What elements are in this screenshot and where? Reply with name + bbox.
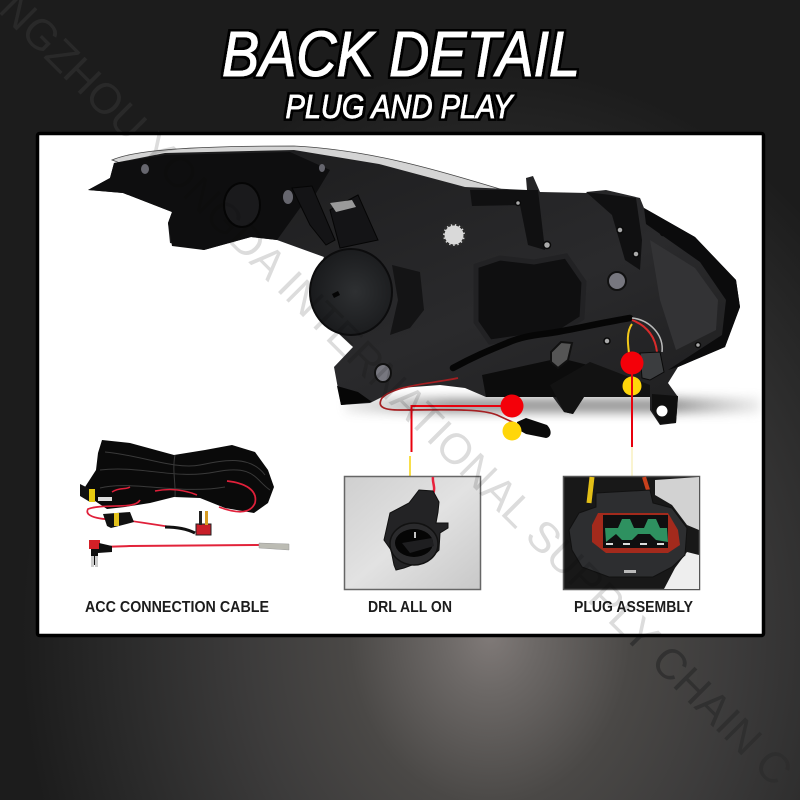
green terminal block xyxy=(605,519,668,542)
caption: ACC CONNECTION CABLE: ACC CONNECTION CABLE xyxy=(85,599,269,616)
connector bore xyxy=(395,529,433,557)
red wire xyxy=(433,477,434,494)
yellow marker: DRL xyxy=(502,422,522,440)
small fuse branch wire xyxy=(87,500,186,529)
ground shadow xyxy=(345,398,760,413)
black lead xyxy=(165,527,195,533)
title: BACK DETAIL: BACK DETAIL xyxy=(222,18,580,90)
ACC connection cable photo xyxy=(80,440,289,567)
yellow waterproof plug xyxy=(103,512,134,528)
connector pin xyxy=(414,532,416,538)
right side rim xyxy=(644,208,740,370)
inner recessed panel xyxy=(476,256,584,342)
connector mouth xyxy=(390,523,438,565)
lower dark base xyxy=(482,358,600,397)
panel: white product panel xyxy=(38,134,764,636)
black bullet connector xyxy=(517,418,551,438)
dome cap xyxy=(310,249,392,335)
wiring loom xyxy=(453,318,630,368)
plug housing xyxy=(569,490,687,577)
left foot xyxy=(337,386,372,405)
pins xyxy=(606,543,664,545)
key slot xyxy=(402,538,434,553)
left upper dark shell xyxy=(88,152,330,250)
socket black xyxy=(603,515,668,548)
adjuster knob xyxy=(443,224,465,246)
subtitle: PLUG AND PLAY: PLUG AND PLAY xyxy=(286,88,514,125)
red marker: DRL xyxy=(500,394,524,418)
coloured wires at socket xyxy=(628,324,632,353)
caption: PLUG ASSEMBLY: PLUG ASSEMBLY xyxy=(574,599,694,616)
lamp-side plug xyxy=(640,352,664,380)
white slider xyxy=(330,200,356,212)
bolts xyxy=(516,200,700,348)
connector body xyxy=(384,490,448,570)
grey mounting dots xyxy=(141,164,325,204)
background chrome upper xyxy=(655,477,699,530)
lower bracket xyxy=(550,362,650,414)
caption: DRL ALL ON: DRL ALL ON xyxy=(368,599,452,616)
grey plug discs xyxy=(375,272,626,382)
wire coil xyxy=(85,440,274,513)
top brackets xyxy=(470,190,642,270)
red stem over yellow marker xyxy=(631,374,633,396)
callout line: DRL xyxy=(410,406,512,476)
red marker: plug xyxy=(620,352,644,374)
red wire at top xyxy=(644,477,648,490)
background chrome lower xyxy=(664,552,699,589)
callout line: plug xyxy=(631,365,633,476)
thumbnail: plug assembly photo xyxy=(564,476,700,590)
lower cable xyxy=(100,545,260,547)
red wire on coil xyxy=(219,481,255,512)
dome side collar xyxy=(390,265,424,335)
lamp housing xyxy=(88,150,740,425)
dome slot mark xyxy=(332,291,340,298)
coil highlights xyxy=(100,452,270,497)
latch mark xyxy=(624,570,636,573)
upper yellow plug xyxy=(80,484,112,502)
red wire branch xyxy=(112,487,197,495)
red tail wire xyxy=(380,378,521,426)
mounting ear with hole xyxy=(652,394,678,424)
headlamp back view xyxy=(88,146,760,438)
small grey socket xyxy=(551,342,572,368)
chrome top strip xyxy=(112,146,640,212)
lower fuse tap xyxy=(89,540,112,567)
red seal xyxy=(592,513,680,553)
yellow marker: plug xyxy=(622,376,642,396)
rear lens circle xyxy=(224,183,260,227)
thumbnail: DRL connector photo xyxy=(344,476,480,590)
right side facet xyxy=(650,240,718,350)
fuse tap upper xyxy=(196,511,211,535)
yellow wire xyxy=(589,477,592,503)
clip bracket xyxy=(292,186,378,248)
spade terminal xyxy=(259,543,289,550)
